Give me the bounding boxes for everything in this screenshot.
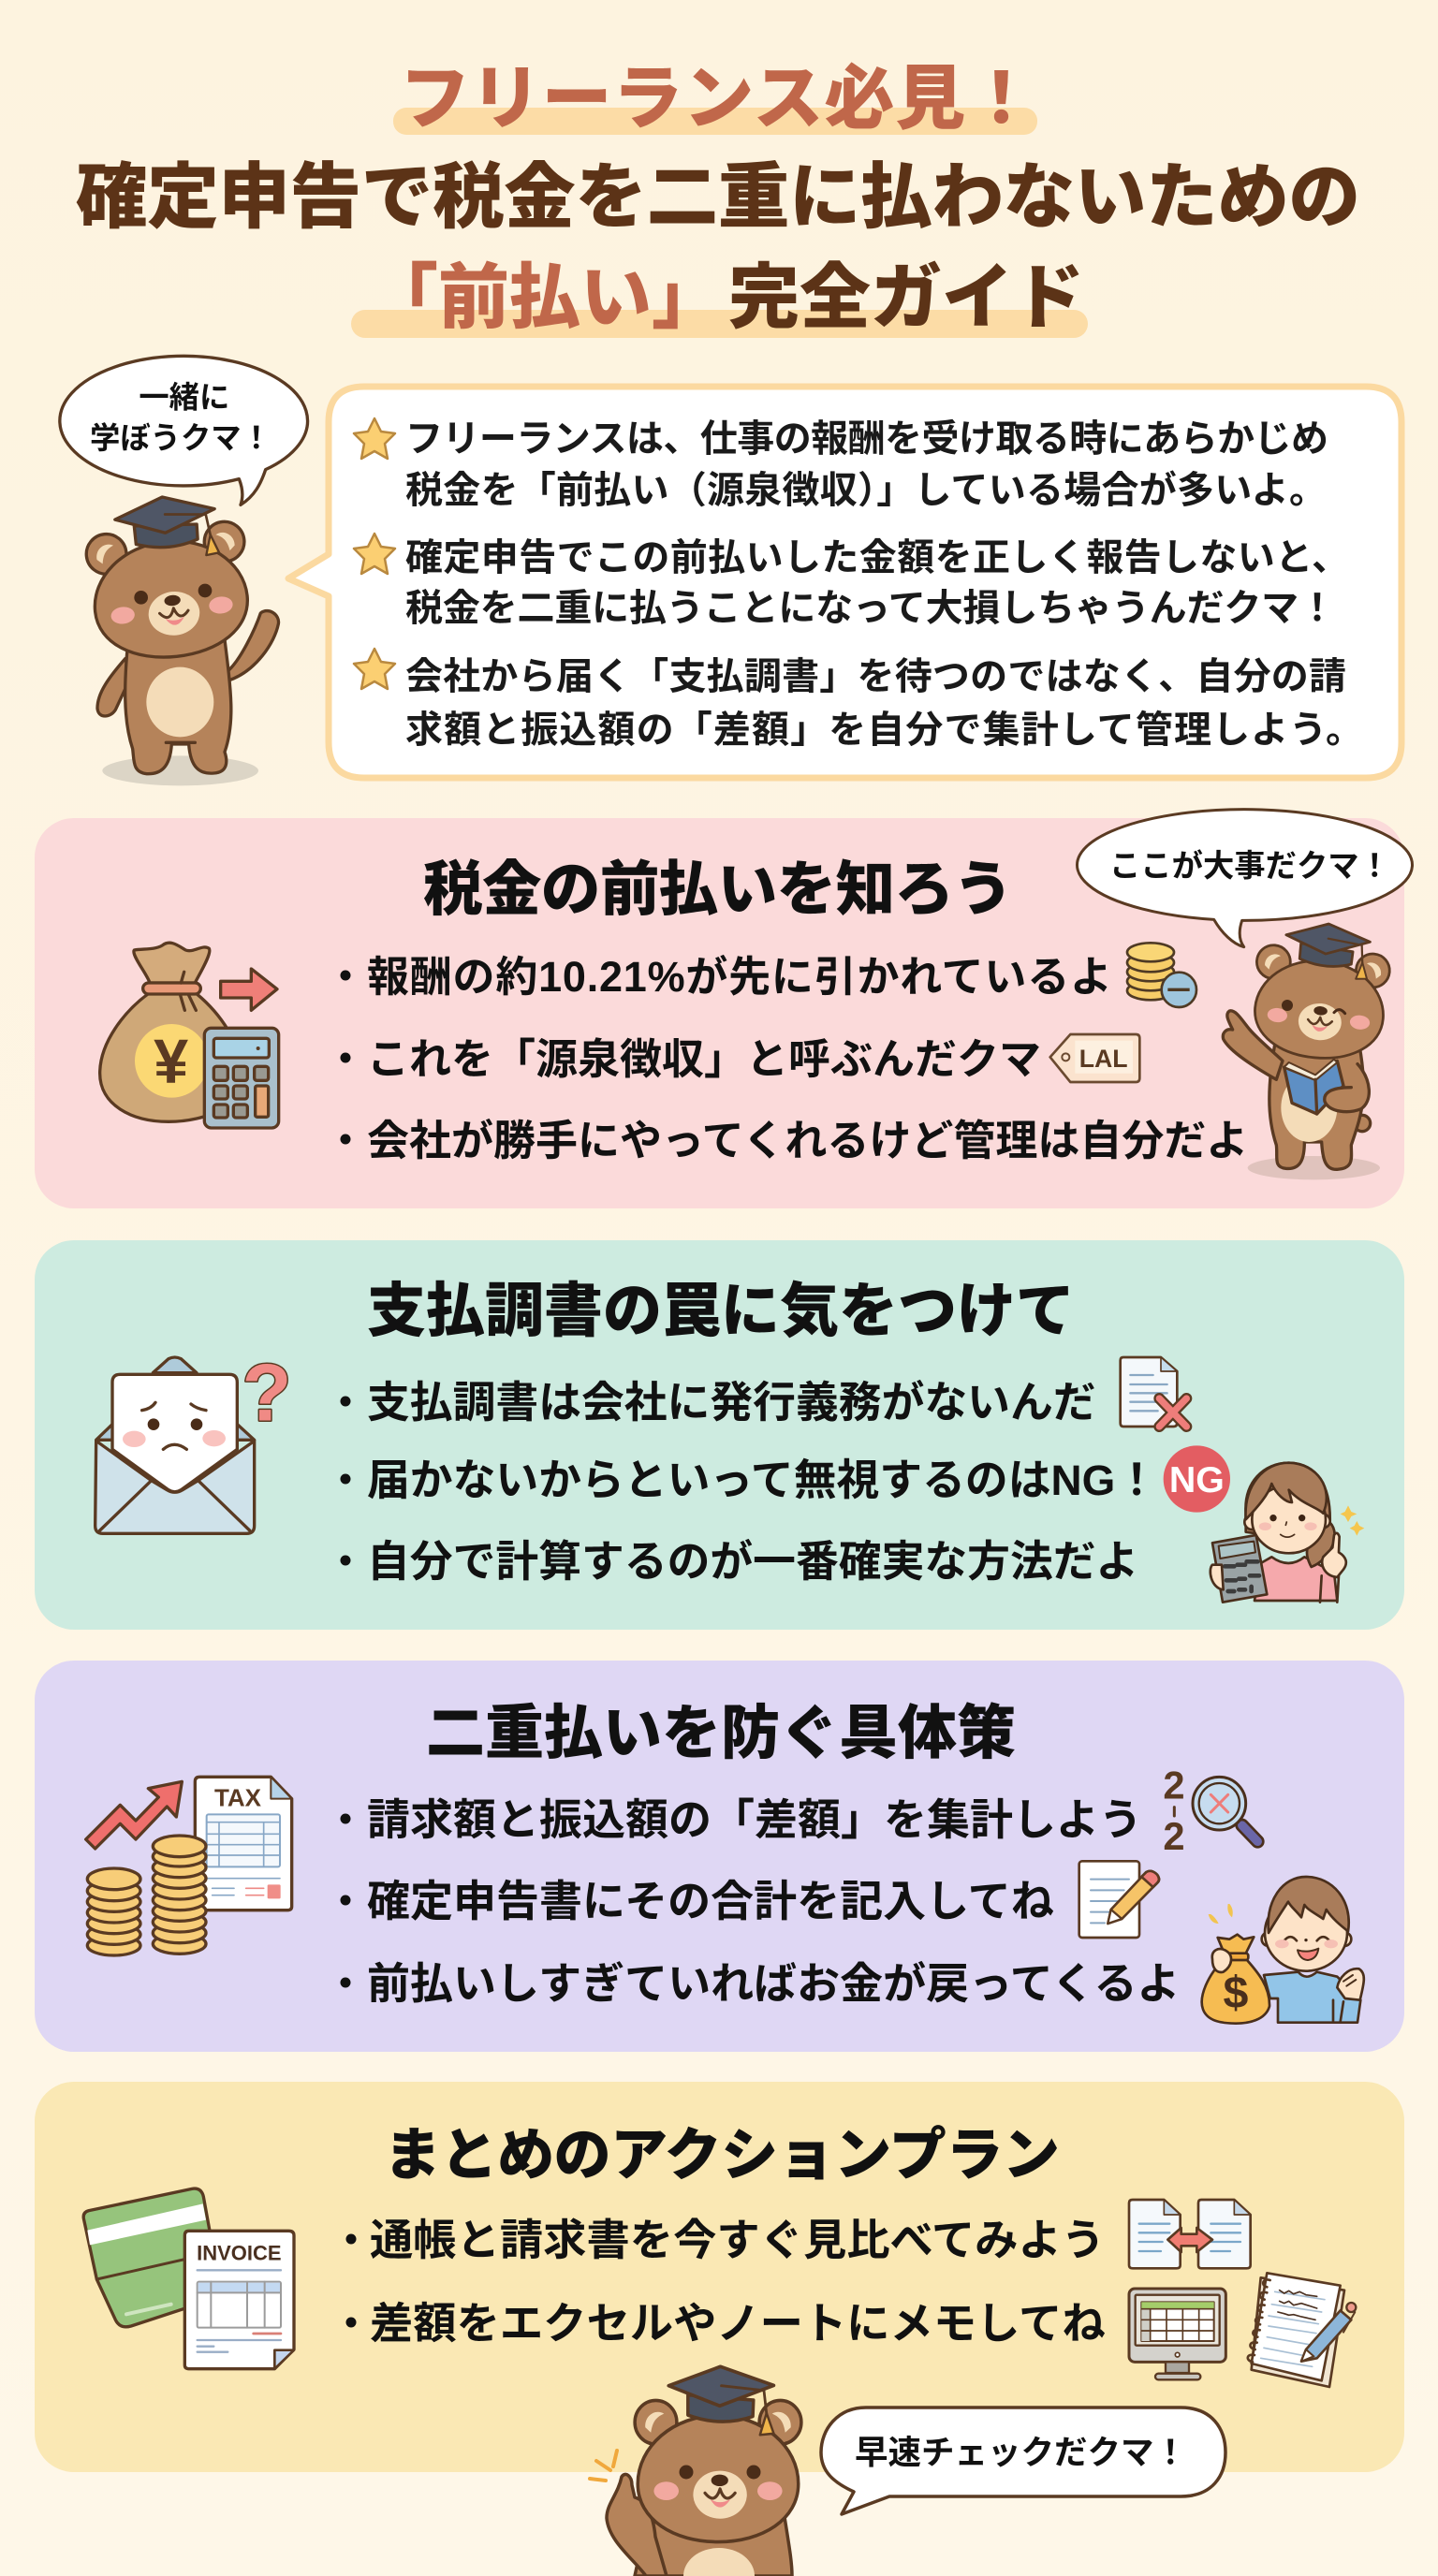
bullet list: 請求額と振込額の「差額」を集計しよう bbox=[367, 1795, 1142, 1844]
illustration: magnifier, notepad and happy boy bbox=[1079, 1764, 1364, 2024]
sparkles bbox=[1341, 1505, 1364, 1536]
character: bottom bear with thumb up bbox=[590, 2366, 1225, 2576]
intro text: 確定申告でこの前払いした金額を正しく報告しないと、 bbox=[405, 537, 1349, 578]
bullet list bbox=[341, 953, 1248, 1164]
icons: document compare, spreadsheet monitor, notebook bbox=[1129, 2200, 1356, 2387]
title highlight bar: third line bbox=[351, 310, 1088, 338]
girl with calculator bbox=[1211, 1463, 1346, 1603]
icon: rising arrow, TAX sheet and coin stacks bbox=[86, 1777, 292, 1955]
icon: star 1 bbox=[354, 418, 395, 459]
sparkle lines bbox=[590, 2451, 617, 2481]
title line 2: 確定申告で税金を二重に払わないための bbox=[76, 158, 1360, 238]
speech bubble: 一緒に学ぼうクマ bbox=[60, 356, 308, 505]
bear head bbox=[635, 2366, 801, 2542]
panel: まとめのアクションプラン bbox=[35, 2082, 1404, 2472]
icon: 2-2 with magnifier: 2 bbox=[1163, 1764, 1185, 1808]
bullet list: 会社が勝手にやってくれるけど管理は自分だよ bbox=[367, 1117, 1248, 1164]
bear body bbox=[1223, 1011, 1371, 1169]
character: waving bear with speech bubble bbox=[60, 356, 308, 785]
bullet list: 前払いしすぎていればお金が戻ってくるよ bbox=[367, 1959, 1180, 2008]
bear head bbox=[81, 489, 256, 665]
title line 3: 「前払い」完全ガイド bbox=[367, 258, 1084, 338]
bear shadow bbox=[102, 755, 258, 785]
icon: money bag, arrow and calculator bbox=[100, 943, 279, 1128]
bullet list bbox=[341, 1795, 1180, 2008]
bullet list: 自分で計算するのが一番確実な方法だよ bbox=[367, 1538, 1138, 1586]
panel: 支払調書の罠に気をつけて bbox=[35, 1240, 1404, 1630]
panel: intro explanation bbox=[288, 387, 1401, 778]
bear head bbox=[1249, 918, 1393, 1063]
speech bubble: 早速チェックだクマ: 早速チェックだクマ！ bbox=[855, 2434, 1187, 2471]
bear arm and body bbox=[607, 2474, 792, 2576]
bear body bbox=[97, 611, 279, 774]
bullet list bbox=[341, 1379, 1158, 1586]
icon: LAL price tag: LAL bbox=[1079, 1045, 1128, 1073]
bullet list bbox=[346, 2216, 1106, 2348]
icon: star 3 bbox=[354, 649, 395, 689]
bullet list: 通帳と請求書を今すぐ見比べてみよう bbox=[370, 2216, 1105, 2264]
intro speech box bbox=[288, 387, 1401, 778]
icon: envelope with sad letter bbox=[95, 1348, 291, 1533]
icon: star 2 bbox=[354, 534, 395, 574]
title line 1: フリーランス必見！ bbox=[400, 59, 1036, 138]
intro text: 税金を二重に払うことになって大損しちゃうんだクマ！ bbox=[405, 588, 1336, 629]
panel heading: 税金の前払いを知ろう bbox=[423, 857, 1013, 923]
icon: NG badge bbox=[1164, 1445, 1230, 1513]
icon: coin stack with minus bbox=[1127, 943, 1196, 1007]
panel heading: 支払調書の罠に気をつけて bbox=[367, 1279, 1075, 1344]
speech bubble: 早速チェックだクマ bbox=[821, 2408, 1225, 2514]
bullet list: 報酬の約10.21%が先に引かれているよ bbox=[367, 953, 1112, 1001]
intro text: フリーランスは、仕事の報酬を受け取る時にあらかじめ bbox=[405, 418, 1328, 460]
panel background bbox=[35, 1240, 1404, 1630]
icon: passbook and invoice: INVOICE bbox=[197, 2241, 282, 2264]
speech bubble: ここが大事だクマ: ここが大事だクマ！ bbox=[1109, 849, 1390, 885]
boy with money bag bbox=[1202, 1877, 1364, 2024]
icon: money bag, arrow and calculator: ¥ bbox=[154, 1028, 188, 1097]
speech bubble: ここが大事だクマ bbox=[1078, 810, 1413, 947]
panel: 税金の前払いを知ろう bbox=[35, 810, 1413, 1208]
character: bear with book and small icons bbox=[1050, 810, 1413, 1179]
icon: 2-2 with magnifier bbox=[1163, 1764, 1257, 1858]
icon: LAL price tag bbox=[1050, 1034, 1139, 1082]
intro text bbox=[405, 418, 1363, 751]
title highlight bar: first line bbox=[393, 108, 1037, 135]
icon: document with red cross bbox=[1121, 1357, 1186, 1427]
panel: 二重払いを防ぐ具体策 bbox=[35, 1661, 1404, 2052]
intro text: 会社から届く「支払調書」を待つのではなく、自分の請 bbox=[405, 656, 1346, 697]
intro text: 税金を「前払い（源泉徴収）」している場合が多いよ。 bbox=[405, 470, 1327, 511]
icon: spiral notebook and pen bbox=[1248, 2273, 1356, 2387]
intro text: 求額と振込額の「差額」を自分で集計して管理しよう。 bbox=[405, 710, 1363, 751]
title bbox=[76, 59, 1360, 338]
panel heading: 二重払いを防ぐ具体策 bbox=[426, 1701, 1016, 1766]
speech bubble: 一緒に学ぼうクマ: 学ぼうクマ！ bbox=[90, 421, 271, 455]
icon: notepad and pencil bbox=[1079, 1861, 1159, 1938]
illustration: document, NG badge and girl with calculator bbox=[1121, 1357, 1364, 1603]
bear eyes bbox=[134, 584, 212, 605]
icon: spreadsheet on monitor bbox=[1129, 2289, 1225, 2379]
panel background bbox=[35, 1661, 1404, 2052]
panel background bbox=[35, 2082, 1404, 2472]
icon: rising arrow, TAX sheet and coin stacks: TAX bbox=[214, 1783, 262, 1811]
panel heading: まとめのアクションプラン bbox=[384, 2123, 1060, 2187]
speech bubble: 一緒に学ぼうクマ: 一緒に bbox=[139, 381, 229, 415]
boy with money bag: $ bbox=[1224, 1968, 1249, 2018]
bullet list: これを「源泉徴収」と呼ぶんだクマ bbox=[367, 1035, 1041, 1083]
bullet list: 支払調書は会社に発行義務がないんだ bbox=[367, 1379, 1096, 1427]
bear shadow bbox=[1248, 1156, 1380, 1179]
icon: passbook and invoice bbox=[83, 2188, 294, 2369]
icon: NG badge: NG bbox=[1169, 1459, 1225, 1500]
icon: 2-2 with magnifier: 2 bbox=[1163, 1814, 1185, 1858]
bear eyes: open and wink bbox=[1282, 1000, 1345, 1014]
bullet list: 差額をエクセルやノートにメモしてね bbox=[370, 2299, 1106, 2348]
bullet list: 確定申告書にその合計を記入してね bbox=[367, 1877, 1054, 1925]
icon: envelope with sad letter: ? bbox=[242, 1348, 291, 1438]
bullet list: 届かないからといって無視するのはNG！ bbox=[367, 1456, 1158, 1504]
icon: two documents with double arrow bbox=[1129, 2200, 1251, 2268]
bear eyes bbox=[680, 2466, 760, 2479]
panel background bbox=[35, 818, 1404, 1208]
